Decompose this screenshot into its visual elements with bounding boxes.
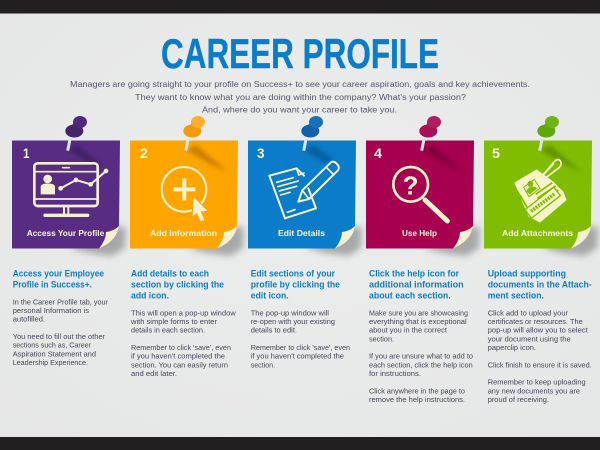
column 3 text xyxy=(251,268,350,369)
top bar xyxy=(0,0,600,14)
card 2: add information: 2 xyxy=(140,145,148,161)
card 3: edit details xyxy=(248,116,362,256)
column 1 text: autofilled. xyxy=(13,315,45,324)
column 4 text: about you in the correct xyxy=(369,326,448,335)
column 4 text: If you are unsure what to add to xyxy=(369,352,473,361)
column 2 text: section. You can easily return xyxy=(131,360,228,369)
column 1 text: Aspiration Statement and xyxy=(13,349,96,358)
column 4 text: Make sure you are showcasing xyxy=(369,308,468,317)
pin xyxy=(65,116,87,151)
column 1 text: Access your Employee xyxy=(13,268,104,280)
column 5 text: paperclip icon. xyxy=(488,343,536,352)
column 2 text: details in each section. xyxy=(131,326,205,335)
column 3 text: if you haven't completed the xyxy=(251,352,344,361)
column 2 text: and edit later. xyxy=(131,369,177,378)
column 1 text: You need to fill out the other xyxy=(13,332,105,341)
column 5 text xyxy=(488,268,592,404)
card 3: edit details: 3 xyxy=(257,145,265,161)
card 5: add attachments xyxy=(484,116,598,256)
column 2 text: Remember to click 'save', even xyxy=(131,343,231,352)
card 5: add attachments: 5 xyxy=(492,145,500,161)
column 2 text xyxy=(130,268,236,378)
column 4 text xyxy=(369,268,473,404)
column 4 text: Click anywhere in the page to xyxy=(369,386,465,395)
column 5 text: ment section. xyxy=(488,290,544,302)
column 5 text: your document using the xyxy=(488,334,571,343)
column 3 text: The pop-up window will xyxy=(251,308,329,317)
column 4 text: Click the help icon for xyxy=(369,268,459,280)
column 5 text: Remember to keep uploading xyxy=(488,378,586,387)
icon: paperclip and certificates xyxy=(514,159,567,223)
column 4 text: additional information xyxy=(369,280,464,290)
icon: document and pencil xyxy=(269,162,339,218)
number: 1 xyxy=(23,145,30,161)
column 3 text: profile by clicking the xyxy=(251,280,340,290)
label: Use Help xyxy=(402,228,437,238)
column 3 text: Edit sections of your xyxy=(251,268,335,280)
column 3 text: Remember to click 'save', even xyxy=(251,343,350,352)
column 1 text: sections such as, Career xyxy=(13,341,91,350)
column 1 text: Profile in Success+. xyxy=(13,280,92,290)
icon: add circle and cursor xyxy=(162,167,208,222)
column 4 text: about each section. xyxy=(369,290,451,302)
label: Access Your Profile xyxy=(27,228,104,238)
card 4: use help: 4 xyxy=(374,145,382,161)
column 2 text: with simple forms to enter xyxy=(130,317,217,326)
column 5 text: Click add to upload your xyxy=(488,308,568,317)
intro text: They want to know what you are doing within the company? What's your passion? xyxy=(135,92,466,102)
column 5 text: any new documents you are xyxy=(488,386,580,395)
column 1 text xyxy=(13,268,108,367)
label: Add Attachments xyxy=(502,228,573,238)
column 4 text: remove the help instructions. xyxy=(369,395,465,404)
column 5 text: Click finish to ensure it is saved. xyxy=(488,360,592,369)
card 1: access your profile xyxy=(12,116,126,256)
column 2 text: section by clicking the xyxy=(131,280,224,290)
card 4: use help xyxy=(366,116,480,256)
column 5 text: pop-up will allow you to select xyxy=(488,326,589,335)
column 5 text: proud of receiving. xyxy=(488,395,549,404)
column 3 text: re-open with your existing xyxy=(251,317,335,326)
column 5 text: certificates or resources. The xyxy=(488,317,583,326)
card 2: add information xyxy=(130,116,244,256)
title: CAREER PROFILE xyxy=(161,30,439,77)
intro text: And, where do you want your career to take you. xyxy=(202,104,397,114)
column 4 text: everything that is exceptional xyxy=(369,317,467,326)
bottom bar xyxy=(0,437,600,450)
label: Edit Details xyxy=(278,228,325,238)
column 1 text: personal Information is xyxy=(13,306,89,315)
column 5 text: Upload supporting xyxy=(488,268,566,280)
label: Add Information xyxy=(150,228,217,238)
column 1 text: Leadership Experience. xyxy=(13,358,88,367)
column 3 text: edit icon. xyxy=(251,290,289,302)
column 4 text: section. xyxy=(369,334,394,343)
column 2 text: Add details to each xyxy=(131,268,209,280)
icon: monitor with profile and chart xyxy=(34,163,108,215)
column 4 text: for instructions. xyxy=(369,369,421,378)
column 4 text: each section, click the help icon xyxy=(369,360,473,369)
column 2 text: This will open a pop-up window xyxy=(131,308,236,317)
intro text: Managers are going straight to your profile on Success+ to see your career aspiration, goals and key achievements. xyxy=(70,79,530,89)
intro text xyxy=(70,79,530,114)
icon: magnifier with question mark: ? xyxy=(403,170,419,200)
column 1 text: In the Career Profile tab, your xyxy=(13,298,108,306)
column 3 text: section. xyxy=(251,360,275,369)
column 2 text: add icon. xyxy=(131,290,169,302)
column 5 text: documents in the Attach- xyxy=(488,280,592,290)
column 3 text: details to edit. xyxy=(251,326,297,335)
column 2 text: if you haven't completed the xyxy=(131,352,225,361)
